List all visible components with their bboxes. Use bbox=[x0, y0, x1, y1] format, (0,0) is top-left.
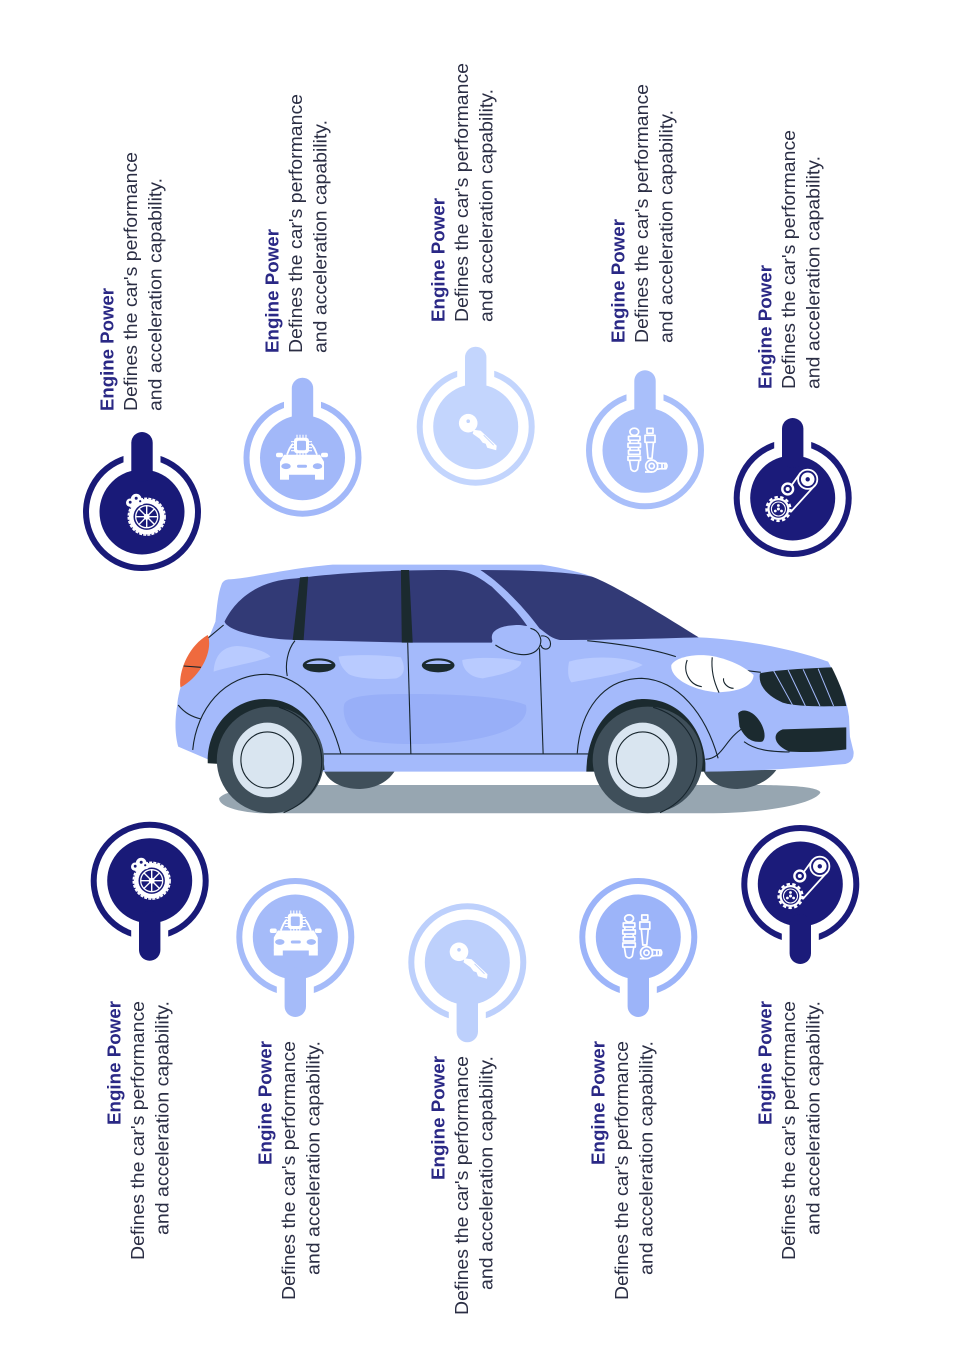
text block: and acceleration capability. bbox=[476, 89, 496, 322]
text block: Defines the car's performance bbox=[279, 1041, 299, 1300]
callout top 2 bbox=[246, 94, 358, 514]
side windows bbox=[225, 570, 527, 643]
text block: Engine Power bbox=[428, 198, 448, 322]
far side tires bbox=[324, 770, 776, 789]
text block: Defines the car's performance bbox=[779, 1001, 799, 1260]
text block: Defines the car's performance bbox=[632, 84, 652, 343]
text block bbox=[756, 130, 824, 389]
door shade bbox=[344, 694, 526, 744]
text block: Defines the car's performance bbox=[128, 1001, 148, 1260]
pin marker bbox=[737, 418, 849, 554]
icon: key bbox=[450, 942, 488, 979]
front wheel bbox=[593, 707, 703, 813]
lower air intake bbox=[776, 727, 846, 752]
wheel arches bbox=[208, 699, 705, 772]
callout bottom 2 bbox=[239, 881, 351, 1300]
callout top 4 bbox=[589, 84, 701, 506]
pin marker bbox=[246, 378, 358, 514]
text block: Engine Power bbox=[756, 1001, 776, 1125]
text block bbox=[588, 1041, 656, 1300]
icon: timing belt bbox=[766, 470, 817, 521]
text block: Defines the car's performance bbox=[121, 152, 141, 411]
windshield bbox=[480, 570, 699, 640]
text block: Defines the car's performance bbox=[779, 130, 799, 389]
body lines bbox=[178, 625, 789, 759]
callout top 3 bbox=[420, 63, 532, 483]
text block: Engine Power bbox=[588, 1041, 608, 1165]
text block: and acceleration capability. bbox=[804, 1001, 824, 1235]
icon: car with chip bbox=[276, 435, 328, 480]
ground shadow bbox=[219, 785, 820, 813]
callout bottom 3 bbox=[411, 906, 523, 1315]
text block: Defines the car's performance bbox=[612, 1041, 632, 1300]
pin marker bbox=[582, 881, 694, 1017]
text block: Engine Power bbox=[608, 219, 628, 343]
car illustration bbox=[175, 565, 854, 813]
icon: suspension parts bbox=[623, 915, 662, 959]
side mirror bbox=[492, 625, 541, 654]
text block: and acceleration capability. bbox=[656, 110, 676, 343]
text block: and acceleration capability. bbox=[476, 1056, 496, 1290]
callout bottom 5 bbox=[744, 828, 856, 1260]
text block: and acceleration capability. bbox=[804, 156, 824, 389]
front grille bbox=[760, 667, 846, 706]
pin marker bbox=[411, 906, 523, 1042]
text block: Engine Power bbox=[262, 229, 282, 353]
headlight bbox=[671, 655, 754, 693]
pin marker bbox=[86, 432, 198, 568]
icon: suspension parts bbox=[628, 428, 667, 472]
text block: Engine Power bbox=[104, 1001, 124, 1125]
car body bbox=[175, 565, 854, 772]
callout bottom 4 bbox=[582, 881, 694, 1300]
text block: and acceleration capability. bbox=[304, 1041, 324, 1275]
fog light bbox=[738, 711, 765, 742]
pin marker bbox=[744, 828, 856, 964]
text block bbox=[262, 94, 330, 353]
rear wheel bbox=[217, 707, 324, 813]
pin marker bbox=[239, 881, 351, 1017]
tail light bbox=[180, 635, 209, 687]
text block bbox=[428, 1056, 496, 1315]
icon: tire bbox=[126, 494, 165, 535]
window pillars bbox=[293, 570, 413, 643]
callout top 5 bbox=[737, 130, 849, 554]
text block: Defines the car's performance bbox=[452, 63, 472, 322]
text block: Engine Power bbox=[98, 288, 118, 411]
text block: and acceleration capability. bbox=[636, 1041, 656, 1275]
door handles bbox=[303, 658, 455, 672]
text block: Defines the car's performance bbox=[286, 94, 306, 353]
text block bbox=[608, 84, 676, 343]
icon: car with chip bbox=[270, 910, 322, 956]
text block: and acceleration capability. bbox=[310, 120, 330, 353]
text block bbox=[428, 63, 496, 322]
text block: Defines the car's performance bbox=[452, 1056, 472, 1315]
pin marker bbox=[420, 347, 532, 483]
text block: Engine Power bbox=[428, 1056, 448, 1180]
icon: tire bbox=[131, 858, 170, 899]
text block: Engine Power bbox=[256, 1041, 276, 1165]
text block bbox=[98, 152, 166, 411]
pin marker bbox=[94, 825, 206, 961]
callout top 1 bbox=[86, 152, 198, 568]
text block bbox=[104, 1001, 172, 1260]
callout bottom 1 bbox=[94, 825, 206, 1260]
icon: timing belt bbox=[778, 857, 829, 908]
text block: and acceleration capability. bbox=[152, 1001, 172, 1235]
body reflections bbox=[214, 646, 643, 682]
icon: key bbox=[459, 414, 497, 450]
text block bbox=[756, 1001, 824, 1260]
text block: Engine Power bbox=[756, 265, 776, 389]
text block: and acceleration capability. bbox=[146, 178, 166, 411]
pin marker bbox=[589, 370, 701, 506]
text block bbox=[256, 1041, 324, 1300]
